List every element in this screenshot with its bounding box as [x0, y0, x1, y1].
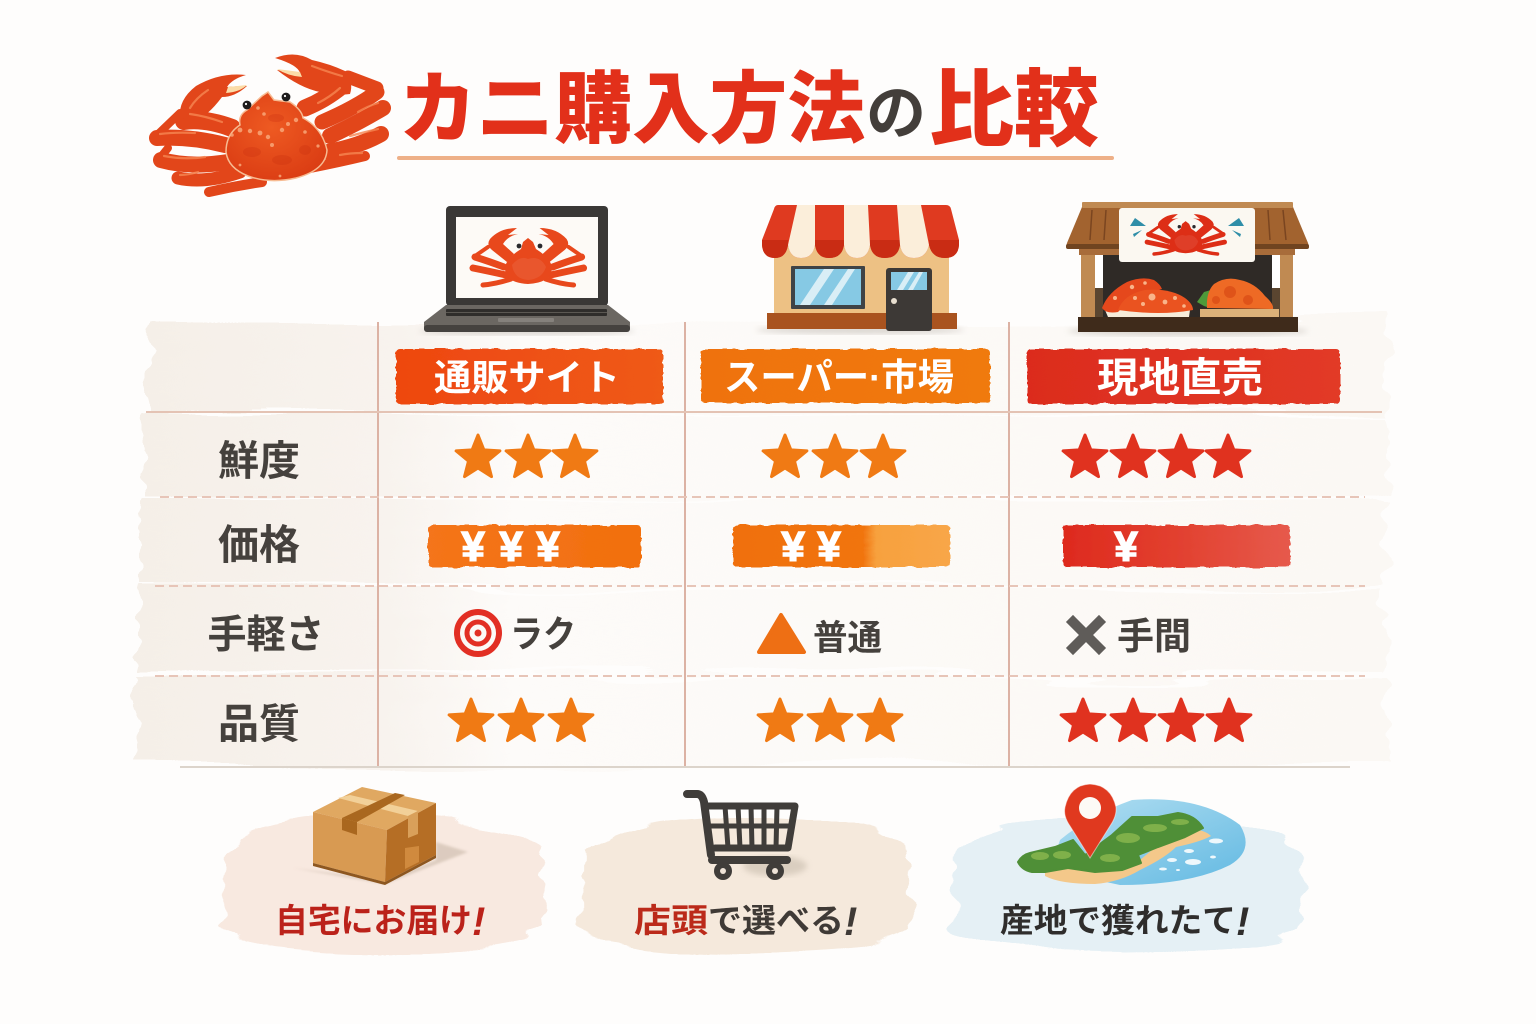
price bar: direct: ¥	[1114, 523, 1138, 570]
price bar: supermarket: ¥	[781, 523, 805, 570]
panel: home delivery callout: 自宅にお届け	[275, 902, 472, 939]
header: supermarket and market	[701, 349, 990, 403]
icon: shopping cart	[687, 794, 807, 880]
panel: origin callout: !	[1236, 900, 1249, 944]
header: mail order: 通販サイト	[434, 357, 620, 398]
stars: quality mail order	[449, 699, 593, 741]
icon: cardboard box	[293, 787, 468, 885]
header: mail order	[396, 349, 663, 404]
title: 比較	[929, 63, 1099, 157]
stars: freshness supermarket	[763, 435, 905, 477]
panel: home delivery callout	[222, 787, 546, 952]
stars: quality supermarket	[758, 699, 902, 741]
rating: laborious	[1073, 616, 1191, 657]
panel: in-store callout: !	[844, 900, 857, 944]
price bar: supermarket	[733, 523, 950, 570]
price bar: mail order: ¥	[536, 523, 560, 570]
icon: large red crab	[155, 54, 383, 192]
rating: laborious: 手間	[1117, 616, 1191, 657]
panel: in-store callout: で選べる	[708, 902, 844, 939]
panel: in-store callout: 店頭	[634, 902, 708, 939]
row label: price: 価格	[218, 522, 300, 568]
rating: easy	[457, 612, 576, 655]
icon: supermarket store	[756, 205, 964, 334]
icon: local fish market stall	[1066, 202, 1309, 336]
icon: map pin on island	[1018, 784, 1246, 885]
panel: comparison table	[138, 322, 1390, 767]
price bar: mail order: ¥	[461, 523, 485, 570]
row label: convenience: 手軽さ	[207, 614, 325, 657]
stars: quality direct	[1061, 699, 1251, 741]
title	[399, 63, 1099, 157]
rating: average: 普通	[813, 619, 882, 658]
rating: easy: ラク	[510, 614, 576, 655]
panel: origin callout	[954, 784, 1304, 952]
price bar: mail order: ¥	[499, 523, 523, 570]
title: カニ購入方法	[399, 65, 865, 153]
rating: average	[759, 615, 882, 658]
price bar: mail order	[428, 523, 641, 570]
row label: freshness: 鮮度	[218, 438, 300, 484]
stars: freshness mail order	[456, 435, 597, 477]
title: の	[866, 80, 926, 147]
header: direct from origin: 現地直売	[1097, 355, 1263, 401]
price bar: supermarket: ¥	[817, 523, 841, 570]
title underline	[397, 156, 1114, 160]
panel: in-store callout	[582, 794, 914, 952]
panel: origin callout: 産地で獲れたて	[1000, 902, 1236, 939]
header: supermarket and market: スーパー·市場	[724, 357, 954, 398]
price bar: direct	[1063, 523, 1290, 570]
icon: laptop	[419, 206, 635, 335]
stars: freshness direct	[1063, 435, 1250, 477]
header: direct from origin	[1027, 349, 1340, 404]
row label: quality: 品質	[218, 701, 300, 747]
panel: home delivery callout: !	[472, 900, 485, 944]
